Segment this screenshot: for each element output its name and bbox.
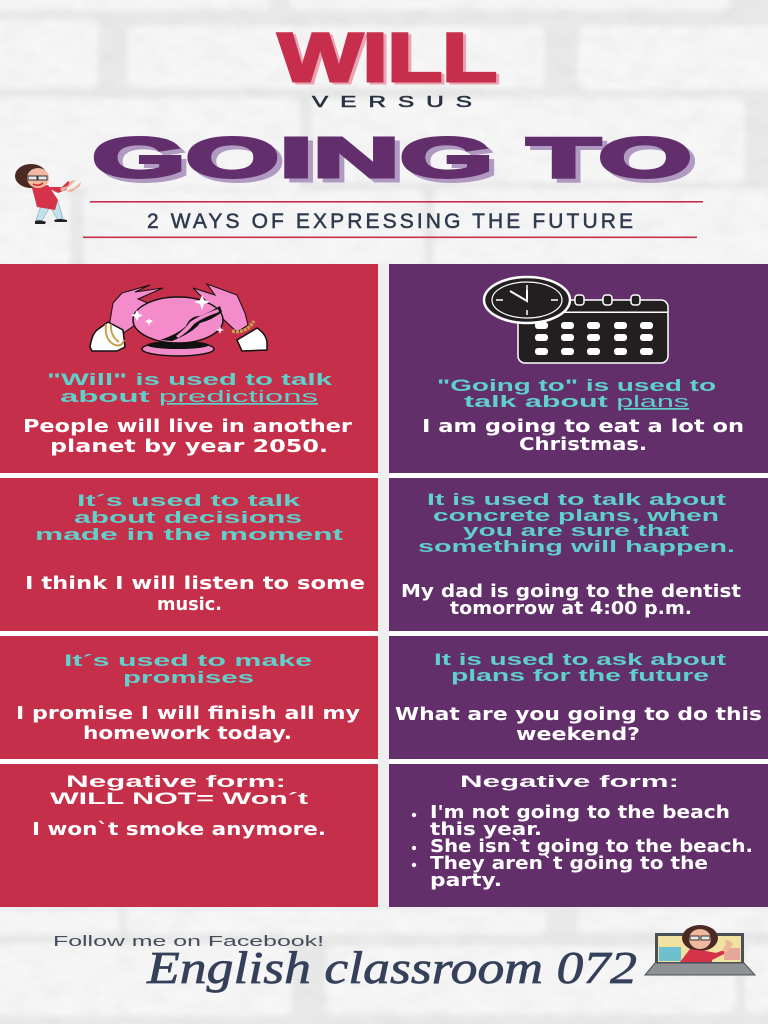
divider line: top bbox=[90, 201, 703, 203]
heading: going to plans: "Going to" is used to bbox=[437, 376, 716, 395]
example: will predictions: planet by year 2050. bbox=[50, 436, 328, 457]
heading: will negative form: WILL NOT= Won´t bbox=[50, 789, 309, 808]
heading: going to plans: talk about plans bbox=[464, 392, 689, 411]
heading: will predictions bbox=[47, 370, 333, 406]
example: will decisions bbox=[25, 573, 365, 615]
footer text: English classroom 072: English classroom 072 bbox=[146, 942, 637, 993]
heading: will promises bbox=[64, 651, 312, 687]
heading: will promises: It´s used to make bbox=[64, 651, 312, 670]
panel: going to future plans question bbox=[389, 636, 768, 759]
heading: will decisions bbox=[35, 491, 344, 544]
list: going to negative examples: She isn`t going to the beach. bbox=[430, 836, 753, 857]
icon: pointing bitmoji bbox=[15, 164, 81, 224]
heading: going to concrete plans bbox=[418, 490, 735, 556]
example: going to plans: Christmas. bbox=[519, 434, 647, 455]
example: going to future plans question: weekend? bbox=[516, 724, 640, 745]
heading: will negative form bbox=[50, 772, 309, 808]
example: going to concrete plans: My dad is going to the dentist bbox=[401, 581, 741, 602]
icon: crystal ball with hands bbox=[90, 284, 267, 356]
panel: will promises bbox=[0, 636, 378, 759]
panel: will decisions bbox=[0, 478, 378, 631]
example: will promises: I promise I will finish all my bbox=[16, 703, 360, 724]
panel: will negative form bbox=[0, 764, 378, 907]
example: going to plans bbox=[422, 416, 744, 455]
heading: going to negative form: Negative form: bbox=[460, 772, 679, 791]
footer text: follow me on Facebook: Follow me on Facebook! bbox=[53, 933, 324, 950]
example: going to plans: I am going to eat a lot on bbox=[422, 416, 744, 437]
list: going to negative examples: party. bbox=[430, 870, 502, 891]
heading: going to future plans question: It is used to ask about bbox=[434, 650, 727, 669]
title: WILL: WILL bbox=[278, 19, 497, 96]
heading: going to concrete plans: you are sure that bbox=[463, 521, 690, 540]
divider line: bottom bbox=[83, 236, 697, 238]
heading: will decisions: It´s used to talk bbox=[77, 491, 301, 510]
subtitle word: VERSUS: VERSUS bbox=[312, 94, 484, 111]
subtitle: 2 ways of expressing the future: 2 WAYS OF EXPRESSING THE FUTURE bbox=[147, 210, 633, 233]
example: going to future plans question: What are you going to do this bbox=[395, 704, 762, 725]
example: will decisions: I think I will listen to some bbox=[25, 573, 365, 594]
heading: will predictions: about predictions bbox=[60, 387, 318, 406]
heading: going to plans bbox=[437, 376, 716, 411]
panel: going to plans bbox=[389, 264, 768, 473]
example: will predictions: People will live in another bbox=[23, 416, 352, 437]
panel: going to concrete plans bbox=[389, 478, 768, 631]
example: will negative form: I won`t smoke anymore. bbox=[32, 819, 326, 840]
heading: will predictions: "Will" is used to talk bbox=[47, 370, 333, 389]
list: going to negative examples: They aren`t going to the bbox=[430, 853, 708, 874]
heading: going to future plans question bbox=[434, 650, 727, 685]
title: GOING TO: GOING TO bbox=[92, 126, 692, 190]
heading: will promises: promises bbox=[123, 668, 254, 687]
panel: going to negative form bbox=[389, 764, 768, 907]
heading: going to concrete plans: It is used to talk about bbox=[427, 490, 727, 509]
heading: will negative form: Negative form: bbox=[66, 772, 286, 791]
example: will predictions bbox=[23, 416, 352, 457]
heading: going to future plans question: plans for the future bbox=[451, 666, 709, 685]
heading: going to concrete plans: concrete plans, when bbox=[433, 506, 719, 525]
example: will promises bbox=[16, 703, 360, 744]
heading: will decisions: about decisions bbox=[74, 508, 302, 527]
heading: going to concrete plans: something will happen. bbox=[418, 537, 735, 556]
list: going to negative examples: I'm not going to the beach bbox=[430, 802, 730, 823]
example: going to future plans question bbox=[395, 704, 762, 745]
example: going to concrete plans bbox=[401, 581, 741, 619]
example: will promises: homework today. bbox=[83, 723, 292, 744]
heading: will decisions: made in the moment bbox=[35, 525, 344, 544]
icon: clock and calendar bbox=[484, 277, 668, 363]
icon: bitmoji in laptop bbox=[645, 925, 755, 975]
panel: will predictions bbox=[0, 264, 378, 473]
example: going to concrete plans: tomorrow at 4:00 p.m. bbox=[450, 598, 692, 619]
list: going to negative examples bbox=[412, 802, 753, 891]
example: will decisions: music. bbox=[157, 594, 222, 615]
list: going to negative examples: this year. bbox=[430, 819, 542, 840]
